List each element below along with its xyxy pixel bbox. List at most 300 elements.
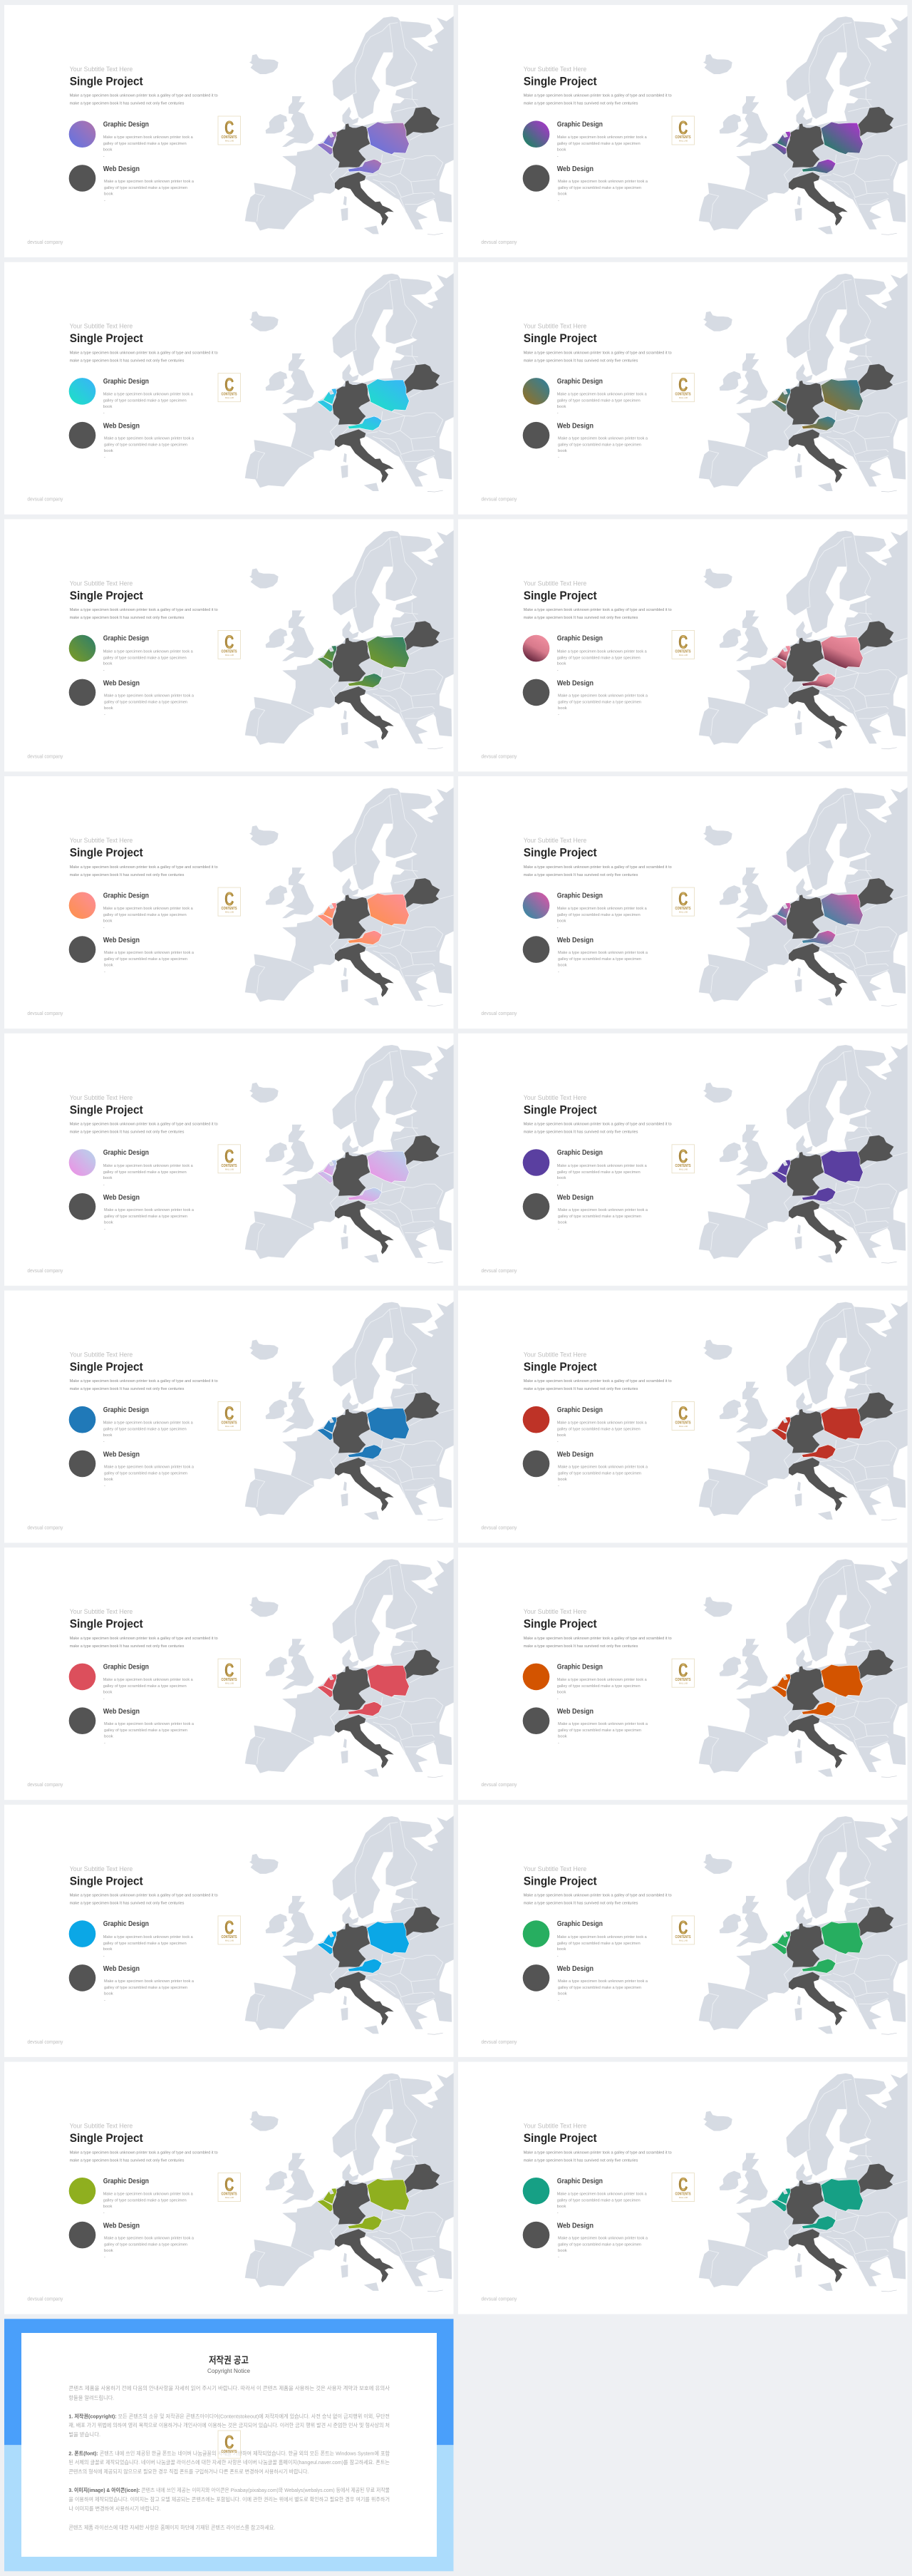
- description: [70, 1637, 218, 1649]
- body: graphic design: Make a type specimen book unknown printer took a: [557, 1164, 648, 1168]
- body: graphic design: Make a type specimen book unknown printer took a: [103, 135, 194, 140]
- body: graphic design: [103, 907, 194, 930]
- title: Single Project: [524, 589, 597, 602]
- description: make a type specimen book It has survived not only five centuries: [524, 873, 638, 877]
- title: Single Project: [70, 1360, 143, 1374]
- paragraph: image and icon: 3. 이미지(image) & 아이콘(icon): 콘텐츠 내에 쓰인 제공는 이미지와 아이콘은 Pixabay(pixabay.com)와 Webalys(webalys.com) 등에서 제공된 무료 저작물: [68, 2487, 390, 2493]
- legend circle: web design: [523, 679, 549, 706]
- legend circle: graphic design: [523, 378, 549, 405]
- map of Europe: [245, 1816, 455, 2034]
- legend circle: graphic design: [69, 1664, 95, 1690]
- body: web design: -: [104, 2255, 105, 2260]
- body: web design: [104, 951, 195, 974]
- title: Single Project: [70, 1617, 143, 1631]
- body: web design: book: [104, 1478, 113, 1482]
- description: make a type specimen book It has survived not only five centuries: [524, 2158, 638, 2163]
- logo watermark: MALL LAB: [679, 911, 688, 914]
- body: graphic design: -: [103, 1440, 105, 1444]
- description: Make a type specimen book unknown printer took a galley of type and scrambled it to: [524, 1894, 672, 1898]
- body: web design: galley of type scrambled make a type specimen: [104, 1986, 187, 1990]
- body: graphic design: [103, 1164, 194, 1187]
- body: graphic design: Make a type specimen book unknown printer took a: [557, 649, 648, 654]
- description: [524, 1637, 672, 1649]
- body: graphic design: -: [557, 2211, 559, 2215]
- body: graphic design: Make a type specimen book unknown printer took a: [103, 649, 194, 654]
- description: Make a type specimen book unknown printer took a galley of type and scrambled it to: [524, 2150, 672, 2155]
- legend circle: web design: [69, 679, 95, 706]
- body: graphic design: galley of type scrambled make a type specimen: [103, 1942, 187, 1946]
- description: [524, 2150, 672, 2163]
- description: make a type specimen book It has survived not only five centuries: [70, 1644, 185, 1649]
- body: web design: Make a type specimen book unknown printer took a: [104, 180, 195, 184]
- footer: devsual company: [481, 2040, 517, 2045]
- paragraph: image and icon: [68, 2487, 390, 2512]
- body: web design: -: [558, 455, 559, 460]
- logo watermark: MALL LAB: [225, 2196, 234, 2199]
- footer: devsual company: [481, 1783, 517, 1788]
- intro paragraph: 항들을 알려드립니다.: [68, 2395, 114, 2401]
- logo watermark: C: [678, 1145, 688, 1167]
- body: graphic design: Make a type specimen book unknown printer took a: [103, 393, 194, 397]
- body: graphic design: galley of type scrambled make a type specimen: [557, 399, 641, 403]
- body: graphic design: [557, 907, 648, 930]
- subtitle: Your Subtitle Text Here: [70, 1094, 133, 1102]
- description: make a type specimen book It has survived not only five centuries: [524, 359, 638, 363]
- footer: devsual company: [481, 240, 517, 245]
- footer: devsual company: [27, 1011, 63, 1016]
- heading: graphic design: Graphic Design: [103, 892, 149, 900]
- logo watermark: C: [224, 2431, 234, 2453]
- map of Europe: [699, 16, 908, 235]
- paragraph: image and icon: 을 이용하여 제작되었습니다. 이미지는 참고 모델 제공되는 콘텐츠에는 포함됩니다. 이에 관한 권리는 위에서 별도로 확인하고 필요한 경우 여기를 위주하거: [68, 2496, 390, 2503]
- legend circle: web design: [523, 165, 549, 192]
- description: make a type specimen book It has survived not only five centuries: [524, 102, 638, 106]
- description: Make a type specimen book unknown printer took a galley of type and scrambled it to: [70, 608, 218, 612]
- description: Make a type specimen book unknown printer took a galley of type and scrambled it to: [70, 1894, 218, 1898]
- subtitle: Your Subtitle Text Here: [524, 837, 586, 845]
- legend circle: web design: [69, 165, 95, 192]
- body: graphic design: Make a type specimen book unknown printer took a: [557, 135, 648, 140]
- logo watermark: CONTENTS: [221, 2450, 237, 2454]
- body: graphic design: Make a type specimen book unknown printer took a: [103, 1678, 194, 1682]
- body: graphic design: -: [103, 1954, 105, 1958]
- logo watermark: [672, 1145, 694, 1173]
- body: graphic design: -: [103, 411, 105, 416]
- heading: graphic design: Graphic Design: [103, 1406, 149, 1414]
- body: graphic design: galley of type scrambled make a type specimen: [557, 913, 641, 917]
- body: graphic design: [103, 393, 194, 416]
- subtitle: Your Subtitle Text Here: [524, 1865, 586, 1873]
- footer: devsual company: [27, 2040, 63, 2045]
- body: web design: [558, 694, 648, 717]
- heading: graphic design: Graphic Design: [557, 1920, 603, 1928]
- body: web design: [558, 1722, 648, 1746]
- description: [524, 1122, 672, 1135]
- paragraph: copyright: 1. 저작권(copyright): 모든 콘텐츠의 소유 및 저작권은 콘텐츠아이디어(Contentstokeout)에 저작자에게 있습니다. 사전 승낙 없이 금지행위 이외, 무단전: [68, 2413, 390, 2419]
- logo watermark: CONTENTS: [675, 907, 691, 911]
- logo watermark: C: [224, 1403, 234, 1424]
- logo watermark: CONTENTS: [221, 1421, 237, 1426]
- slide 14: [458, 1547, 908, 1800]
- body: graphic design: -: [557, 926, 559, 930]
- body: web design: galley of type scrambled make a type specimen: [558, 957, 641, 962]
- body: graphic design: Make a type specimen book unknown printer took a: [103, 1935, 194, 1939]
- subtitle: Your Subtitle Text Here: [70, 579, 133, 587]
- description: make a type specimen book It has survived not only five centuries: [524, 1644, 638, 1649]
- body: web design: -: [104, 455, 105, 460]
- logo watermark: CONTENTS: [221, 649, 237, 654]
- panel: [4, 1805, 453, 2057]
- legend circle: web design: [523, 2222, 549, 2248]
- body: graphic design: galley of type scrambled make a type specimen: [103, 1427, 187, 1431]
- logo watermark: MALL LAB: [225, 1425, 234, 1428]
- heading: graphic design: Graphic Design: [557, 1406, 603, 1414]
- logo watermark: MALL LAB: [679, 396, 688, 399]
- description: make a type specimen book It has survived not only five centuries: [524, 1387, 638, 1391]
- description: [70, 1379, 218, 1391]
- body: graphic design: [103, 1678, 194, 1701]
- map of Europe: [245, 2073, 455, 2292]
- logo watermark: CONTENTS: [221, 1164, 237, 1168]
- panel: [4, 776, 453, 1029]
- footer: devsual company: [481, 2297, 517, 2302]
- logo watermark: MALL LAB: [225, 396, 234, 399]
- body: graphic design: -: [103, 154, 105, 158]
- body: graphic design: book: [557, 1690, 566, 1694]
- body: graphic design: galley of type scrambled make a type specimen: [103, 2199, 187, 2203]
- description: Make a type specimen book unknown printer took a galley of type and scrambled it to: [70, 865, 218, 870]
- title: Single Project: [524, 846, 597, 860]
- body: web design: -: [558, 1998, 559, 2002]
- body: web design: book: [104, 192, 113, 197]
- legend circle: graphic design: [523, 892, 549, 919]
- description: [70, 608, 218, 620]
- footer: devsual company: [27, 240, 63, 245]
- body: graphic design: galley of type scrambled make a type specimen: [103, 656, 187, 660]
- logo watermark: [218, 2431, 241, 2458]
- body: web design: galley of type scrambled make a type specimen: [558, 1215, 641, 1219]
- body: graphic design: -: [103, 669, 105, 673]
- body: graphic design: -: [103, 926, 105, 930]
- description: Make a type specimen book unknown printer took a galley of type and scrambled it to: [524, 865, 672, 870]
- legend circle: web design: [523, 936, 549, 963]
- logo watermark: CONTENTS: [221, 393, 237, 397]
- body: web design: -: [558, 1227, 559, 1231]
- body: graphic design: book: [103, 1176, 113, 1180]
- heading: graphic design: Graphic Design: [557, 635, 603, 643]
- legend circle: graphic design: [523, 1920, 549, 1947]
- slide 12: [458, 1290, 908, 1542]
- logo watermark: C: [678, 1917, 688, 1938]
- light blue lower band: [4, 2445, 453, 2571]
- logo watermark: MALL LAB: [679, 140, 688, 143]
- body: graphic design: book: [103, 1947, 113, 1952]
- heading: web design: Web Design: [103, 423, 140, 431]
- slide 4: [458, 262, 908, 515]
- body: web design: book: [558, 192, 567, 197]
- panel: [458, 1805, 908, 2057]
- body: graphic design: Make a type specimen book unknown printer took a: [557, 907, 648, 911]
- body: web design: -: [104, 1741, 105, 1746]
- logo watermark: [218, 1659, 241, 1687]
- heading: graphic design: Graphic Design: [557, 892, 603, 900]
- body: web design: book: [558, 449, 567, 453]
- paragraph: font: 된 서체의 글꼴로 제작되었습니다. 네이버 나눔글꼴 라이선스에 대한 자세한 사항은 네이버 나눔글꼴 홈페이지(hangeul.naver.com)를 참고하세요. 폰트는: [68, 2459, 390, 2466]
- logo watermark: C: [678, 1403, 688, 1424]
- body: graphic design: [103, 1935, 194, 1958]
- footer: devsual company: [27, 1783, 63, 1788]
- logo watermark: [672, 1401, 694, 1430]
- body: web design: Make a type specimen book unknown printer took a: [104, 1979, 195, 1984]
- body: graphic design: Make a type specimen book unknown printer took a: [103, 1421, 194, 1426]
- body: graphic design: book: [103, 919, 113, 923]
- logo watermark: MALL LAB: [679, 1939, 688, 1942]
- body: web design: [558, 951, 648, 974]
- description: [524, 94, 672, 106]
- body: web design: galley of type scrambled make a type specimen: [104, 443, 187, 448]
- body: web design: galley of type scrambled make a type specimen: [558, 2243, 641, 2247]
- body: web design: [104, 1722, 195, 1746]
- body: web design: -: [558, 970, 559, 974]
- description: Make a type specimen book unknown printer took a galley of type and scrambled it to: [524, 1379, 672, 1384]
- body: web design: book: [558, 1220, 567, 1225]
- slide 16: [458, 1805, 908, 2057]
- map of Europe: [245, 273, 455, 492]
- description: [524, 351, 672, 363]
- subtitle: Your Subtitle Text Here: [70, 837, 133, 845]
- logo watermark: MALL LAB: [225, 1168, 234, 1170]
- title: Single Project: [524, 74, 597, 88]
- body: web design: -: [558, 713, 559, 717]
- legend circle: graphic design: [523, 2178, 549, 2205]
- logo watermark: C: [678, 374, 688, 396]
- paragraph: copyright: 재, 배포 가기 위법에 의하여 영리 목적으로 이용하거나 개인사이에 이용하는 것은 금지되어 있습니다. 이러한 금지 행위 발견 시 준엄한 민사 및 형사상의 처: [68, 2422, 390, 2428]
- description: make a type specimen book It has survived not only five centuries: [70, 1387, 185, 1391]
- body: web design: -: [104, 713, 105, 717]
- body: web design: [104, 180, 195, 202]
- title: Single Project: [70, 1103, 143, 1116]
- description: Make a type specimen book unknown printer took a galley of type and scrambled it to: [524, 351, 672, 355]
- description: Make a type specimen book unknown printer took a galley of type and scrambled it to: [524, 1123, 672, 1127]
- heading: graphic design: Graphic Design: [103, 1149, 149, 1157]
- body: web design: book: [104, 1220, 113, 1225]
- description: make a type specimen book It has survived not only five centuries: [70, 2158, 185, 2163]
- body: graphic design: [103, 2193, 194, 2215]
- logo watermark: [672, 1916, 694, 1944]
- body: graphic design: [557, 1935, 648, 1958]
- heading: web design: Web Design: [557, 2222, 594, 2230]
- body: web design: galley of type scrambled make a type specimen: [104, 700, 187, 704]
- body: web design: book: [104, 706, 113, 711]
- logo watermark: C: [224, 117, 234, 138]
- body: graphic design: galley of type scrambled make a type specimen: [557, 656, 641, 660]
- slide 5: [4, 519, 455, 771]
- subtitle: Your Subtitle Text Here: [70, 66, 133, 73]
- body: web design: book: [104, 964, 113, 968]
- logo watermark: C: [678, 631, 688, 652]
- title: Single Project: [524, 1874, 597, 1887]
- body: graphic design: -: [557, 1440, 559, 1444]
- body: web design: -: [104, 1484, 105, 1488]
- title: Single Project: [70, 331, 143, 345]
- body: web design: [558, 1979, 648, 2002]
- slide 7: [4, 776, 455, 1029]
- panel: [4, 2062, 453, 2314]
- intro paragraph: [68, 2385, 390, 2401]
- body: web design: galley of type scrambled make a type specimen: [558, 1471, 641, 1475]
- logo watermark: C: [224, 888, 234, 910]
- description: [70, 1122, 218, 1135]
- footer: devsual company: [481, 498, 517, 503]
- subtitle: Your Subtitle Text Here: [70, 323, 133, 331]
- map of Europe: [699, 273, 908, 492]
- description: Make a type specimen book unknown printer took a galley of type and scrambled it to: [524, 608, 672, 612]
- panel: [458, 519, 908, 771]
- title: Single Project: [70, 1874, 143, 1887]
- paragraph: copyright: 벌을 받습니다.: [68, 2431, 100, 2438]
- logo watermark: C: [224, 2174, 234, 2195]
- footer: devsual company: [481, 1011, 517, 1016]
- heading: web design: Web Design: [103, 679, 140, 687]
- body: web design: book: [558, 706, 567, 711]
- body: web design: Make a type specimen book unknown printer took a: [104, 1208, 195, 1212]
- body: graphic design: -: [103, 1183, 105, 1187]
- title: Single Project: [70, 2131, 143, 2145]
- panel: [458, 1547, 908, 1800]
- logo watermark: [218, 116, 241, 145]
- body: graphic design: book: [103, 662, 113, 666]
- logo watermark: MALL LAB: [679, 654, 688, 656]
- logo watermark: [672, 630, 694, 659]
- panel: [4, 5, 453, 257]
- logo watermark: MALL LAB: [225, 654, 234, 656]
- title: Single Project: [524, 2131, 597, 2145]
- body: graphic design: -: [557, 154, 559, 158]
- body: web design: book: [558, 2249, 567, 2253]
- body: web design: -: [558, 1741, 559, 1746]
- subtitle: Your Subtitle Text Here: [70, 1608, 133, 1616]
- slide 8: [458, 776, 908, 1029]
- heading: web design: Web Design: [557, 937, 594, 944]
- logo watermark: CONTENTS: [675, 1421, 691, 1426]
- title: Single Project: [524, 1103, 597, 1116]
- legend circle: graphic design: [523, 635, 549, 661]
- description: [70, 865, 218, 877]
- closing line: 콘텐츠 제품 라이선스에 대한 자세한 사항은 홈페이지 하단에 기재된 콘텐츠 라이선스를 참고하세요.: [68, 2525, 275, 2530]
- body: web design: [558, 180, 648, 202]
- description: make a type specimen book It has survived not only five centuries: [70, 1902, 185, 1906]
- body: web design: galley of type scrambled make a type specimen: [558, 1729, 641, 1733]
- slide 17: [4, 2062, 455, 2314]
- logo watermark: C: [678, 2174, 688, 2195]
- legend circle: web design: [523, 1451, 549, 1477]
- body: web design: book: [558, 1735, 567, 1739]
- legend circle: web design: [69, 1964, 95, 1992]
- logo watermark: CONTENTS: [221, 907, 237, 911]
- body: graphic design: galley of type scrambled make a type specimen: [103, 1170, 187, 1175]
- subtitle: Your Subtitle Text Here: [524, 579, 586, 587]
- body: graphic design: book: [557, 919, 566, 923]
- legend circle: graphic design: [69, 892, 95, 919]
- legend circle: web design: [69, 422, 95, 449]
- body: graphic design: Make a type specimen book unknown printer took a: [103, 907, 194, 911]
- map of Europe: [245, 16, 455, 235]
- logo watermark: [218, 887, 241, 916]
- footer: devsual company: [481, 1525, 517, 1531]
- panel: [458, 1034, 908, 1286]
- map of Europe: [699, 2073, 908, 2292]
- description: Make a type specimen book unknown printer took a galley of type and scrambled it to: [70, 351, 218, 355]
- heading: web design: Web Design: [103, 1194, 140, 1202]
- body: graphic design: [103, 649, 194, 673]
- description: [70, 2150, 218, 2163]
- logo watermark: [218, 373, 241, 402]
- logo watermark: CONTENTS: [675, 1164, 691, 1168]
- footer: devsual company: [27, 754, 63, 759]
- body: graphic design: Make a type specimen book unknown printer took a: [557, 1935, 648, 1939]
- body: web design: book: [104, 2249, 113, 2253]
- heading: web design: Web Design: [557, 1194, 594, 1202]
- description: Make a type specimen book unknown printer took a galley of type and scrambled it to: [524, 94, 672, 98]
- logo watermark: CONTENTS: [675, 649, 691, 654]
- body: graphic design: -: [557, 1183, 559, 1187]
- legend circle: web design: [69, 1193, 95, 1220]
- body: web design: Make a type specimen book unknown printer took a: [104, 2237, 195, 2241]
- subtitle: Your Subtitle Text Here: [524, 2123, 586, 2131]
- panel: [4, 1547, 453, 1800]
- body: web design: Make a type specimen book unknown printer took a: [104, 694, 195, 698]
- map of Europe: [699, 1044, 908, 1263]
- logo watermark: C: [224, 1145, 234, 1167]
- legend circle: graphic design: [69, 635, 95, 661]
- description: [70, 94, 218, 106]
- description: make a type specimen book It has survived not only five centuries: [70, 1130, 185, 1135]
- body: graphic design: -: [557, 411, 559, 416]
- description: make a type specimen book It has survived not only five centuries: [70, 616, 185, 620]
- body: graphic design: book: [557, 148, 566, 152]
- slide 2: [458, 5, 908, 257]
- legend circle: graphic design: [523, 1149, 549, 1176]
- body: web design: galley of type scrambled make a type specimen: [104, 1729, 187, 1733]
- logo watermark: C: [224, 1659, 234, 1681]
- panel: [458, 2062, 908, 2314]
- panel: [4, 1034, 453, 1286]
- body: web design: book: [104, 1992, 113, 1996]
- body: graphic design: -: [103, 1697, 105, 1701]
- body: web design: Make a type specimen book unknown printer took a: [558, 2237, 648, 2241]
- heading: web design: Web Design: [557, 1451, 594, 1458]
- intro paragraph: 콘텐츠 제품을 사용하기 전에 다음의 안내사항을 자세히 읽어 주시기 바랍니다. 따라서 이 콘텐츠 제품을 사용하는 것은 사용자 계약과 보호에 유의사: [68, 2385, 390, 2391]
- body: graphic design: galley of type scrambled make a type specimen: [557, 2199, 641, 2203]
- legend circle: web design: [69, 936, 95, 963]
- description: [70, 1894, 218, 1906]
- body: graphic design: book: [557, 1176, 566, 1180]
- body: graphic design: galley of type scrambled make a type specimen: [557, 142, 641, 146]
- logo watermark: MALL LAB: [225, 911, 234, 914]
- heading: web design: Web Design: [103, 2222, 140, 2230]
- body: web design: [104, 2237, 195, 2260]
- map of Europe: [245, 1559, 455, 1778]
- body: web design: [104, 1465, 195, 1488]
- paragraph: font: [68, 2451, 390, 2475]
- title: Single Project: [70, 74, 143, 88]
- heading: graphic design: Graphic Design: [103, 1663, 149, 1671]
- logo watermark: [672, 887, 694, 916]
- subtitle: Your Subtitle Text Here: [524, 1608, 586, 1616]
- legend circle: graphic design: [523, 1406, 549, 1433]
- map of Europe: [699, 1559, 908, 1778]
- body: web design: [558, 1208, 648, 1231]
